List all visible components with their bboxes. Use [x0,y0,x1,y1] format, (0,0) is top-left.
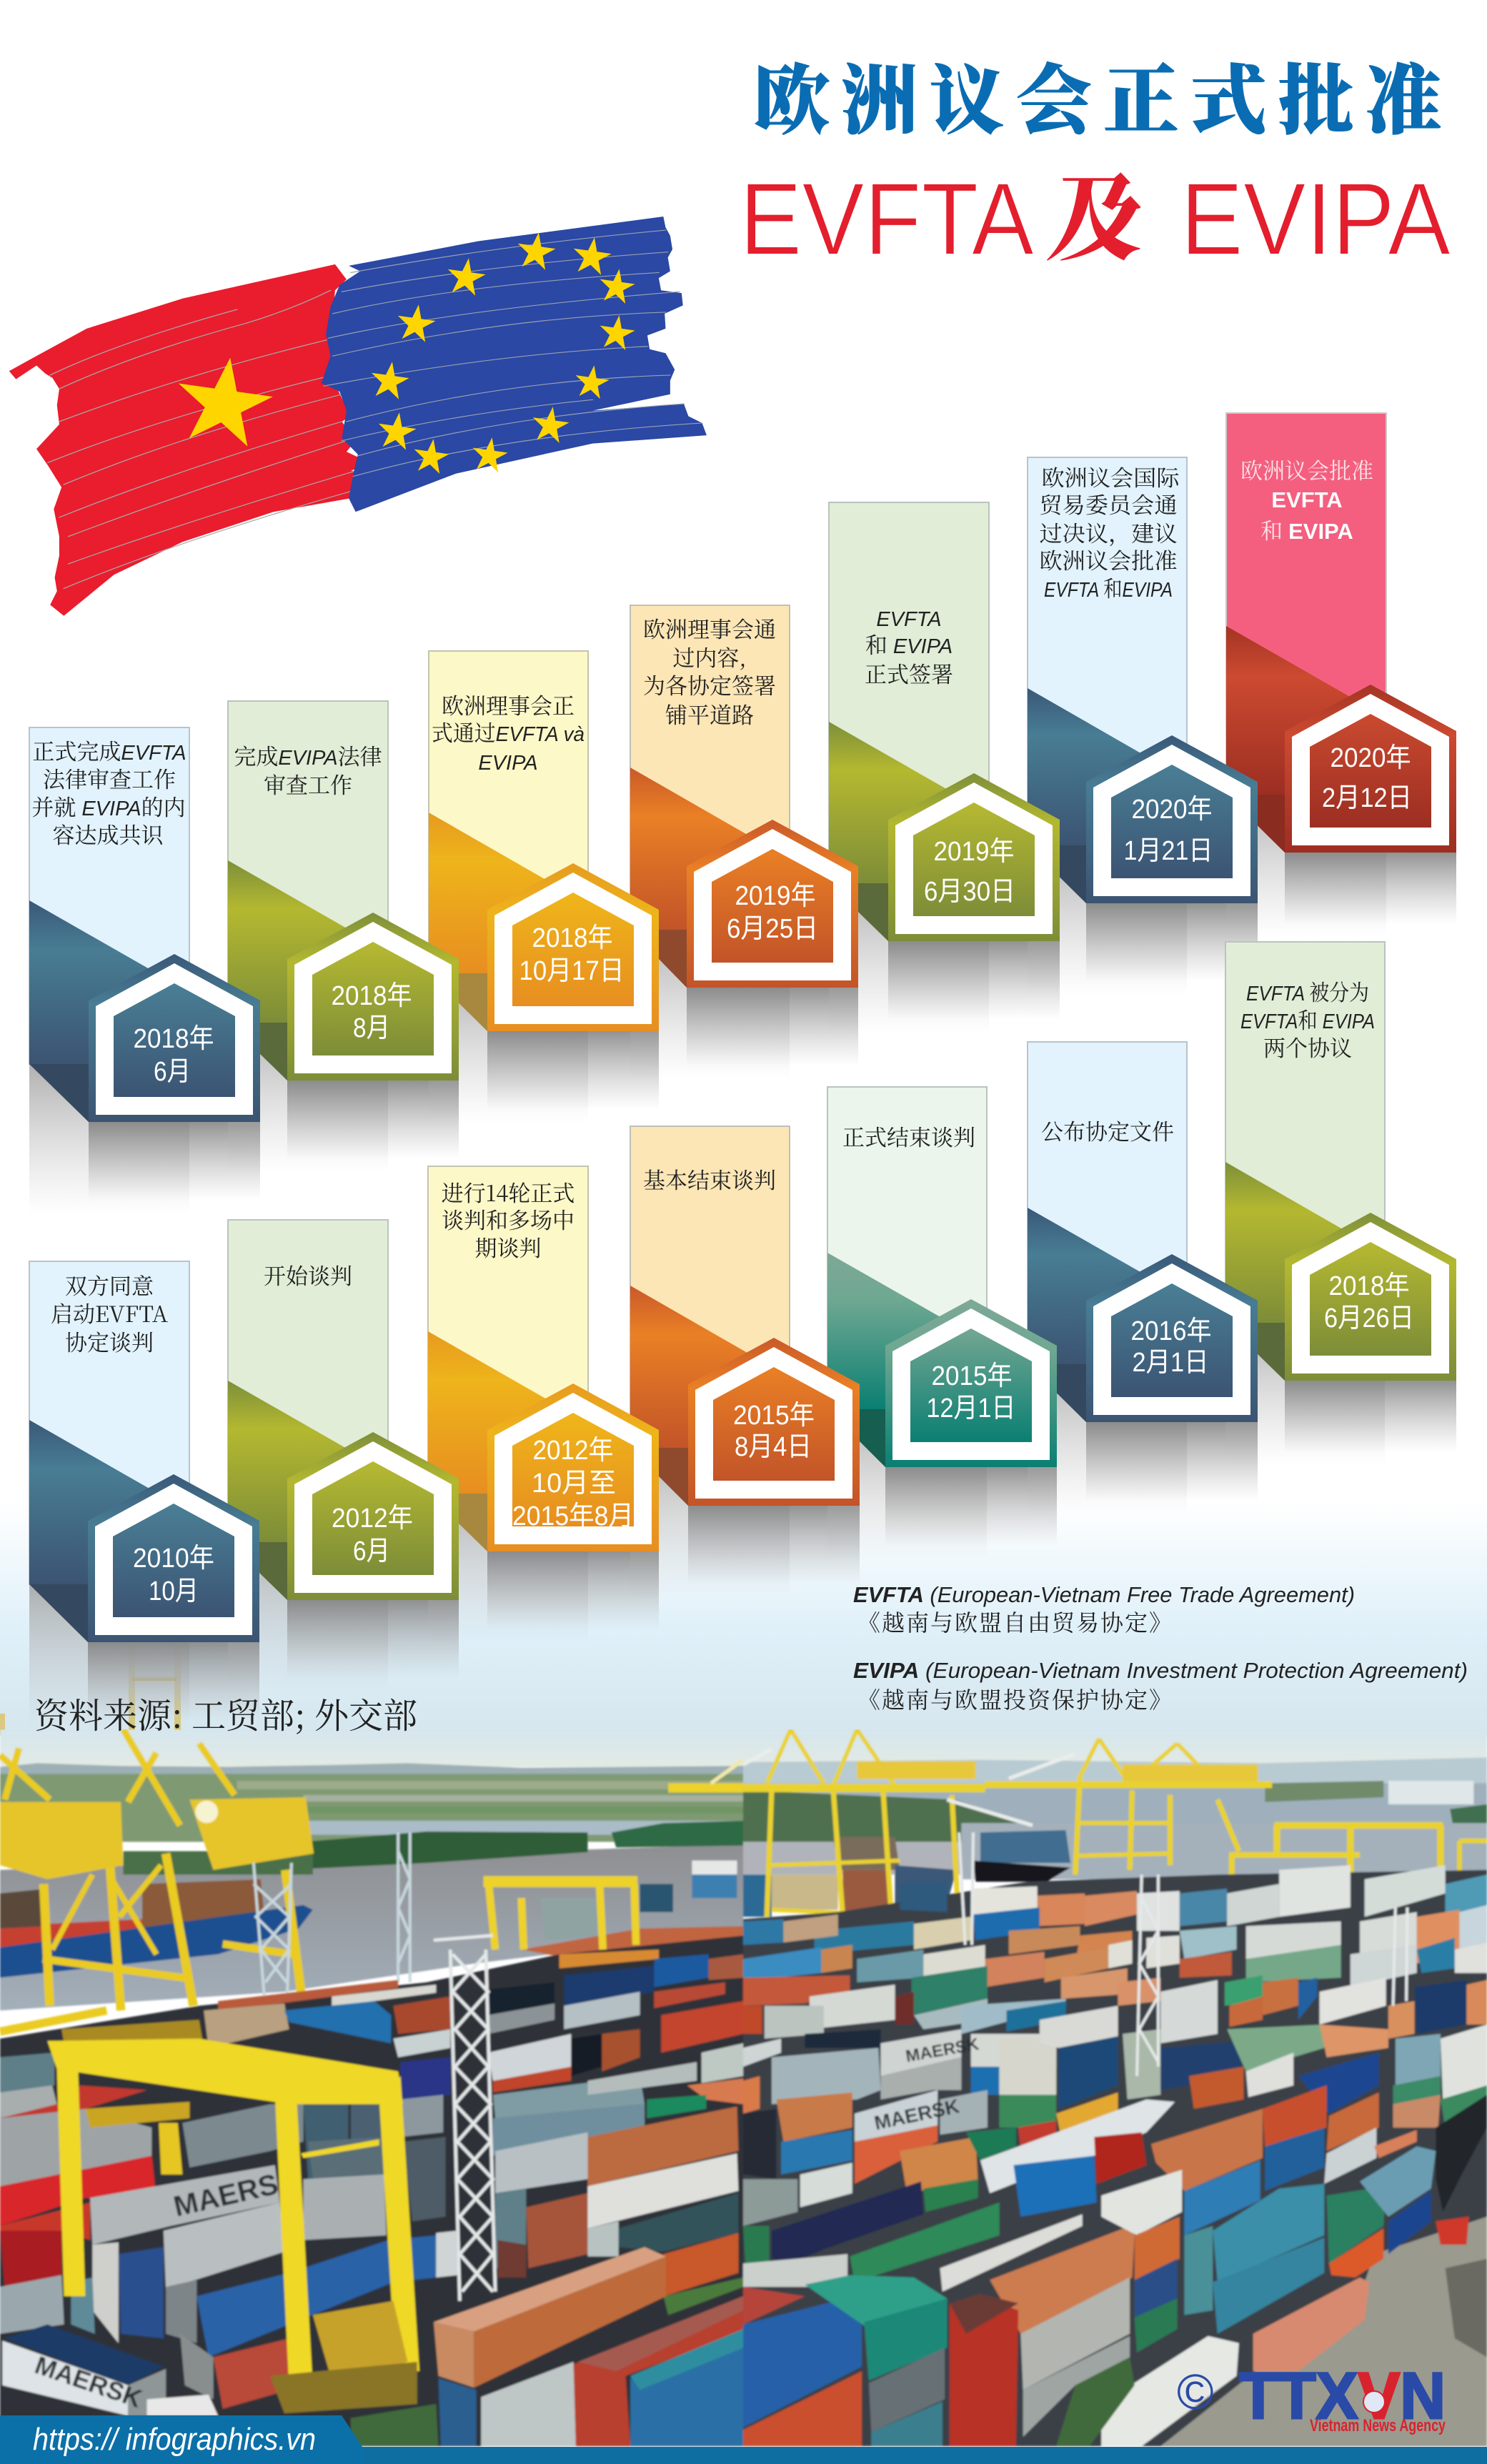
big lattice light tower [434,1935,495,2301]
side containers near quay [1101,2146,1436,2446]
legend: EVIPA [853,1658,1468,1715]
shadow reflections row 2 [29,1323,1456,1727]
card: 2012-06 [228,1220,459,1600]
container yard base [0,1935,743,2446]
ship at quay [743,1830,1070,1917]
card: 2020-01-21: EVFTA 和EVIPA [1044,571,1173,603]
card: 2020-01-21: 1月21日 [1123,836,1213,866]
card: 2018-10-17 [429,651,659,1031]
yard containers left block [0,2052,457,2415]
legend: EVFTA [853,1582,1355,1638]
light tower far [254,1832,410,2010]
yard containers back rows [204,1949,743,2296]
footer bar with url tab [0,2415,1487,2464]
card: 2015-12-01 [827,1087,1057,1467]
shadow reflections row 1 [29,795,1456,1214]
card: 2020-01-21 [1028,457,1258,903]
ship behind cranes [0,1861,743,1977]
card: 2018-10-17: 欧洲理事会正 [442,688,575,720]
card: 2012-10 to 2015-08: 2015年8月 [512,1501,634,1531]
yard containers mid rows [743,1966,1487,2137]
title: EVFTA and EVIPA: EVFTA [740,162,1034,277]
yard containers front rows [743,2035,1417,2353]
sky land and river [0,1729,743,2010]
yard containers front rows: MAERSK [904,2035,980,2066]
card: 2015-12-01: 正式结束谈判 [842,1120,975,1152]
card: 2012-06: 2012年 [332,1504,413,1534]
card: 2020-01-21: 2020年 [1132,795,1212,825]
sky land and river right [743,1729,1487,1879]
card: 2018-06-26: EVFTA 被分为 [1246,975,1369,1007]
card: 2018-06: 2018年 [133,1024,214,1054]
card: 2020-02-12: EVFTA [1271,487,1343,512]
card: 2019-06-25: 欧洲理事会通 [643,612,776,644]
card: 2019-06-25: 铺平道路 [665,697,754,730]
card: 2010-10 [29,1261,259,1642]
card: 2018-06: 6月 [154,1057,191,1087]
flag: EU stars [368,230,637,475]
flag: red field [9,264,401,616]
legend: EVIPA: EVIPA (European-Vietnam Investment Protection Agreement) [853,1658,1468,1683]
card: 2010-10: 10月 [149,1576,199,1606]
yard containers left block: MAERSK [31,2350,146,2413]
card: 2019-06-30: 6月30日 [924,877,1015,907]
yellow rail gantry crane [47,2020,419,2413]
card: 2019-06-30: 2019年 [933,837,1015,867]
source note: 资料来源: 工贸部; 外交部 [34,1689,417,1739]
icon: Vietnam and EU brush flag [9,217,707,616]
card: 2018-10-17: 2018年 [532,923,613,953]
card: 2018-08: 完成EVIPA法律 [234,739,382,771]
timeline row 2 cards [29,942,1456,1642]
yard containers front rows: MAERSK [872,2095,961,2134]
card: 2019-06-30: 正式签署 [865,657,953,689]
card: 2015-08-04: 2015年 [733,1401,815,1431]
card: 2019-06-30: 和 EVIPA [865,627,953,660]
yard containers left block: MAERSK [170,2162,302,2223]
legend: EVFTA: 《越南与欧盟自由贸易协定》 [857,1605,1172,1638]
card: 2016-02-01 [1028,1042,1258,1422]
yard containers far rows [743,1865,1487,1987]
card: 2012-10 to 2015-08: 进行14轮正式 [442,1176,575,1208]
logo: TTXVN: Vietnam News Agency [1310,2416,1446,2435]
title: EVFTA and EVIPA [740,143,1451,279]
card: 2018-06-26: 2018年 [1329,1271,1409,1301]
quay ground and forklift [1160,2095,1487,2446]
foreground containers right half [743,2275,1135,2446]
card: 2018-06-26: EVFTA和 EVIPA [1240,1003,1375,1035]
card: 2020-01-21: 欧洲议会批准 [1039,543,1178,575]
card: 2020-02-12: 2月12日 [1322,783,1412,813]
flag: blue field [322,217,707,512]
card: 2020-01-21: 贸易委员会通 [1039,487,1178,520]
card: 2018-10-17: EVIPA [478,752,538,775]
card: 2018-08: 2018年 [332,981,412,1011]
timeline row 1 cards [29,413,1456,1122]
card: 2010-10: 协定谈判 [65,1325,154,1357]
card: 2018-08 [228,701,459,1081]
legend: EVIPA: 《越南与欧盟投资保护协定》 [857,1682,1172,1715]
faded crane top above photo [0,1642,181,1735]
logo: TTXVN: © [1177,2364,1214,2420]
title: EVFTA and EVIPA: 及 [1043,143,1155,279]
card: 2016-02-01: 公布协定文件 [1041,1114,1174,1146]
far yellow gantry [484,1760,743,1949]
card: 2015-12-01: 12月1日 [926,1394,1016,1424]
container yard base right [743,1870,1487,2446]
card: 2018-10-17: 10月17日 [519,956,625,986]
card: 2020-02-12: 和 EVIPA [1260,513,1353,545]
card: 2015-12-01: 2015年 [932,1361,1012,1391]
card: 2019-06-25: 为各协定签署 [643,668,776,700]
card: 2012-10 to 2015-08: 10月至 [532,1469,616,1499]
title: Chinese heading: 欧洲议会正式批准 [754,41,1441,149]
card: 2012-06: 开始谈判 [264,1258,352,1291]
card: 2018-06-26 [1225,942,1456,1381]
card: 2019-06-30: EVFTA [876,608,942,631]
footer bar with url tab: https:// infographics.vn [33,2422,316,2457]
card: 2015-08-04 [630,1126,860,1506]
light towers right [959,1832,1407,2076]
card: 2015-08-04: 8月4日 [735,1432,812,1462]
card: 2018-08: 8月 [353,1013,390,1043]
logo: TTXVN: TTXVN [1239,2360,1446,2433]
card: 2018-06: 容达成共识 [53,818,164,850]
card: 2016-02-01: 2月1日 [1132,1348,1209,1378]
photo left half [0,1729,743,2446]
card: 2019-06-25 [630,605,858,988]
card: 2018-08: 审查工作 [264,767,352,800]
port photograph background [0,1729,1487,2446]
card: 2012-06: 6月 [353,1536,390,1566]
card: 2018-06-26: 两个协议 [1263,1030,1352,1063]
card: 2018-06: 并就 EVIPA的内 [31,790,186,822]
card: 2019-06-25: 过内容, [672,640,747,672]
card: 2019-06-25: 6月25日 [727,914,818,944]
card: 2012-10 to 2015-08: 谈判和多场中 [442,1203,575,1235]
card: 2018-06 [29,727,260,1122]
card: 2020-01-21: 过决议，建议 [1039,516,1178,548]
photo right half [743,1729,1487,2446]
card: 2018-06: 法律审查工作 [43,762,176,794]
card: 2010-10: 2010年 [133,1544,214,1574]
card: 2020-02-12: 欧洲议会批准 [1240,453,1373,485]
card: 2018-10-17: 式通过EVFTA và [432,715,585,747]
foreground containers left half [351,2247,743,2446]
card: 2010-10: 启动EVFTA [51,1296,169,1328]
card: 2020-01-21: 欧洲议会国际 [1042,460,1180,492]
card: 2020-02-12: 2020年 [1331,743,1411,773]
card: 2016-02-01: 2016年 [1130,1316,1212,1346]
card: 2012-10 to 2015-08 [428,1166,659,1551]
card: 2020-02-12 [1226,413,1456,853]
far yellow cranes right [743,1729,1487,1922]
card: 2015-08-04: 基本结束谈判 [643,1163,776,1195]
card: 2019-06-30 [829,502,1060,941]
card: 2018-06: 正式完成EVFTA [32,734,187,766]
flag: star of Vietnam [171,351,277,449]
card: 2018-06-26: 6月26日 [1324,1303,1414,1333]
title: EVFTA and EVIPA: EVIPA [1180,162,1451,277]
card: 2012-10 to 2015-08: 期谈判 [474,1231,542,1263]
card: 2019-06-25: 2019年 [735,881,816,911]
card: 2010-10: 双方同意 [65,1268,154,1301]
legend: abbreviations [853,1582,1468,1715]
legend: EVFTA: EVFTA (European-Vietnam Free Trade Agreement) [853,1582,1355,1607]
card: 2012-10 to 2015-08: 2012年 [533,1436,613,1466]
quay cranes left [0,1729,314,2032]
